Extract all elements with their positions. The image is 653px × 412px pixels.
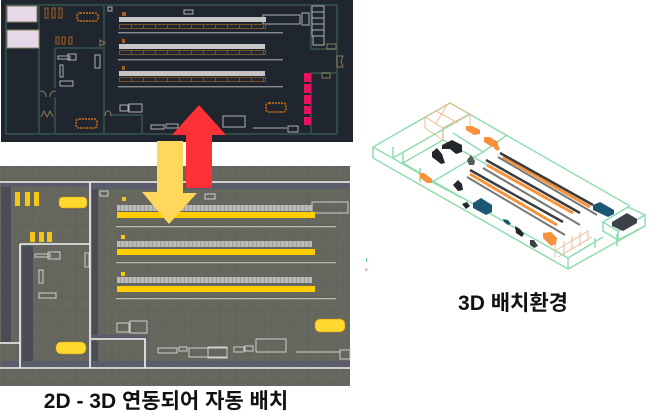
panel: 3D placement top view <box>0 166 350 386</box>
orange furniture <box>420 126 557 246</box>
caption: 3D placement environment: 3D 배치환경 <box>458 292 568 315</box>
white wall lines <box>0 182 350 368</box>
icon: axis marker <box>365 258 368 273</box>
wireframe building <box>373 103 645 269</box>
arrow: yellow down <box>142 141 197 224</box>
CAD walls <box>6 5 337 134</box>
panel: 3D isometric layout <box>373 103 645 269</box>
CAD conveyor lines <box>118 12 283 87</box>
machine outlines <box>35 191 350 359</box>
3D conveyor lines <box>467 153 597 235</box>
orange chairs and tables <box>45 8 286 128</box>
panel: 2D CAD floor plan <box>1 0 353 142</box>
yellow tables and chairs <box>56 197 345 354</box>
magenta blocks <box>304 73 311 125</box>
2D machines <box>58 6 324 132</box>
door marks <box>40 40 343 117</box>
dark machines <box>432 140 538 248</box>
arrow: red up <box>172 105 226 188</box>
pink rooms <box>7 6 39 48</box>
teal machines <box>473 198 614 225</box>
grey press machine <box>612 213 637 231</box>
icon: axis marker: x <box>365 267 368 273</box>
conveyors and yellow lines <box>116 205 336 299</box>
orange room wireframe <box>425 103 592 258</box>
wall faces <box>1 184 98 368</box>
